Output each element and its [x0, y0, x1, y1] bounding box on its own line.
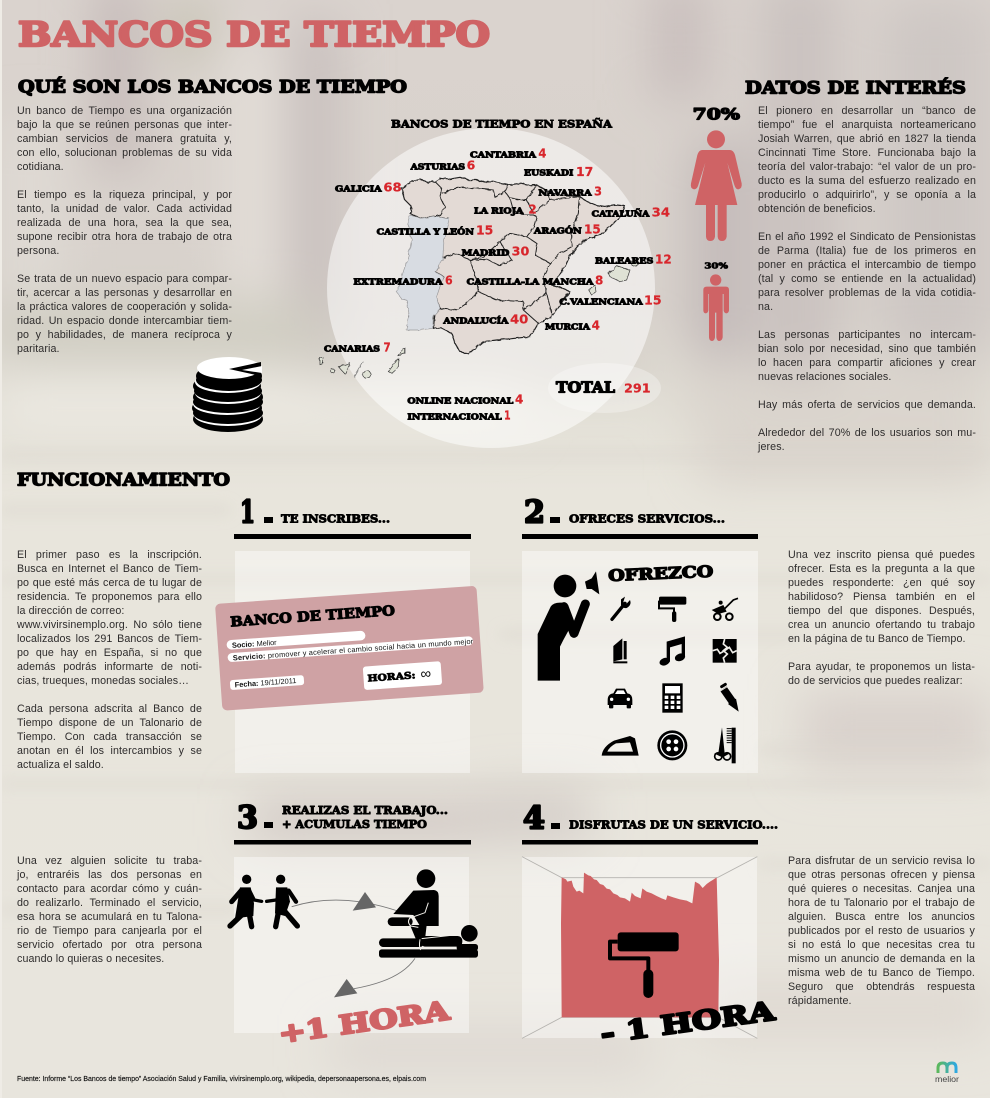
text: step 4 [788, 855, 975, 1007]
icon: man 30% [703, 260, 729, 341]
step 2 heading: OFRECES SERVICIOS... [569, 512, 725, 526]
label: Internacional 1: 1 [504, 408, 511, 422]
text: qué son, paragraph 2: tanto, la unidad de valor. Cada actividad [17, 203, 232, 215]
text: datos de interés, paragraph 2 [758, 231, 976, 313]
label: Murcia 4 [545, 318, 600, 332]
text: datos de interés, paragraph 5 [758, 427, 976, 453]
text: step 4: que otras personas ofrecen y piensa [788, 869, 975, 881]
step 2 heading: 2 [524, 494, 545, 530]
text: qué son, paragraph 3: tir, acercar a las personas y desarrollar en [17, 287, 232, 299]
label: Galicia 68: GALICIA [335, 183, 383, 193]
icon: person with megaphone [538, 571, 599, 681]
text: step 3: servicio ofertado por otra persona [17, 939, 202, 951]
label: C. Valenciana 15: 15 [644, 294, 662, 308]
text: datos de interés, paragraph 1: producirlo o adquirirlo”, y se oponía a la [758, 189, 976, 201]
icon: massage [379, 869, 478, 958]
label: 70%: 70% [693, 105, 740, 124]
label: Online nacional 4: ONLINE NACIONAL [407, 395, 514, 405]
label: Aragón 15 [533, 223, 601, 237]
text: step 3: jo, entraréis las dos personas en [17, 869, 202, 881]
label: Castilla-La Mancha 8: CASTILLA-LA MANCHA [467, 277, 594, 287]
label: Online nacional 4 [407, 392, 523, 406]
label: Cataluña 34: 34 [652, 205, 670, 219]
step 3 heading: REALIZAS EL TRABAJO... [282, 804, 448, 817]
text: step 1, paragraph 2: anotan en él los intercambios y se [17, 745, 202, 757]
text: qué son, paragraph 3: ridad. Un espacio donde intercambiar tiem- [17, 315, 232, 327]
total ellipse backdrop [548, 363, 661, 413]
step 1 heading [240, 494, 390, 530]
text: qué son, paragraph 3: paritaria. [17, 343, 60, 355]
rule [234, 840, 471, 844]
text: qué son, paragraph 1: cotidiana. [17, 161, 64, 173]
text: datos de interés, paragraph 2: de Parma (Italia) fue de los primeros en [758, 245, 976, 257]
heading: qué son los bancos de tiempo: QUÉ SON LOS BANCOS DE TIEMPO [18, 76, 407, 98]
icon: woman 70% [691, 105, 742, 241]
text: datos de interés, paragraph 1: Cincinnati Time Store. Funcionaba bajo la [758, 147, 976, 159]
text: step 4: publicados por el resto de usuarios y [788, 925, 975, 937]
text: qué son, paragraph 2: supone recibir otra hora de trabajo de otra [17, 231, 232, 243]
label: total 291: TOTAL [556, 379, 615, 396]
text: datos de interés, paragraph 3: lo hacen para compartir aficiones y crear [758, 357, 976, 369]
regional labels [324, 146, 672, 422]
text: qué son, paragraph 3: la práctica valores de cooperación y solida- [17, 301, 232, 313]
label: La Rioja 2: 2 [528, 203, 537, 217]
icon: big paint roller [610, 932, 679, 998]
text: step 1, paragraph 1: cias, trueques, monedas sociales… [17, 675, 189, 687]
label: +1 hora: +1 HORA [277, 996, 452, 1050]
text: step 2, paragraph 2: do de servicios que puedes realizar: [788, 675, 963, 687]
arrow: to plus one hour [334, 958, 415, 997]
text: datos de interés, paragraph 5: Alrededor del 70% de los usuarios son mu- [758, 427, 976, 439]
text: step 3: Una vez alguien solicite tu traba- [17, 855, 202, 867]
step 3 heading [237, 800, 448, 836]
text: step 1, paragraph 1: www.vivirsinemplo.org. No sólo tiene [17, 619, 202, 631]
logo: melior [935, 1063, 959, 1084]
label: Baleares 12: BALEARES [595, 255, 654, 265]
footer source: Fuente: Informe “Los Bancos de tiempo” Asociación Salud y Familia, vivirsinemplo.org, wikipedia, depersonaapersona.es, elpais.com [17, 1076, 426, 1083]
text: datos de interés, paragraph 1: obtención de beneficios. [758, 203, 876, 215]
step 4 heading: 4 [523, 800, 545, 836]
text: step 4: qué quieres o necesitas. Canjea una [788, 883, 975, 895]
text: step 1, paragraph 2: Cada persona adscrita al Banco de [17, 703, 202, 715]
card title: BANCO DE TIEMPO [230, 603, 396, 630]
panel: map of Spain [320, 116, 672, 448]
label: Canarias 7: 7 [383, 340, 391, 354]
label: Castilla y León 15 [377, 223, 493, 237]
text: step 2, paragraph 2: Para ayudar, te proponemos un lista- [788, 661, 975, 673]
text: step 1, paragraph 2: Tiempo dispone de un Talonario de [17, 717, 202, 729]
icon: puzzle [713, 639, 737, 663]
card: servicio: Servicio: promover y acelerar el cambio social hacia un mundo mejor [232, 637, 474, 662]
text: datos de interés, paragraph 5: jeres. [758, 441, 785, 453]
text: step 3: rio de Tiempo para canjearla por el [17, 925, 202, 937]
card: horas [363, 661, 442, 690]
label: Aragón 15: 15 [584, 223, 601, 237]
text: qué son, paragraph 1: Un banco de Tiempo es una organización [17, 105, 232, 117]
woman figure [691, 130, 742, 241]
text: datos de interés, paragraph 1: Josiah Warren, que abrió en 1827 la tienda [758, 133, 976, 145]
painted wall [561, 873, 719, 1017]
text: step 2, paragraph 1 [788, 549, 975, 645]
label: Internacional 1: INTERNACIONAL [407, 411, 502, 421]
text: step 1, paragraph 1: la dirección de correo: [17, 605, 124, 617]
map shapes [320, 177, 638, 378]
text: step 1, paragraph 1: po que esté más cerca de tu lugar de [17, 577, 202, 589]
step 2 heading [524, 494, 725, 530]
text: step 2, paragraph 1: Una vez inscrito piensa qué puedes [788, 549, 975, 561]
text: datos de interés, paragraph 1: El pionero en desarrollar un “banco de [758, 105, 976, 117]
label: Online nacional 4: 4 [515, 392, 523, 406]
card: horas: HORAS: [367, 670, 416, 685]
label: La Rioja 2 [474, 203, 537, 217]
card: socio: Socio: Melior [232, 638, 277, 650]
label: Navarra 3: NAVARRA [538, 188, 593, 198]
label: Baleares 12 [595, 252, 672, 266]
icon: pencil [720, 684, 739, 712]
text: step 2, paragraph 1: habilidoso? Piensa también en el [788, 591, 975, 603]
text: step 1, paragraph 1 [17, 549, 202, 687]
panel: step 1 [235, 551, 470, 773]
text: qué son, paragraph 3 [17, 273, 232, 355]
text: step 2, paragraph 1: en la página de tu Banco de Tiempo. [788, 633, 966, 645]
text: qué son, paragraph 2: persona. [17, 245, 59, 257]
text: step 2, paragraph 1: crea un anuncio ofertando tu trabajo [788, 619, 975, 631]
label: C. Valenciana 15: C.VALENCIANA [559, 297, 644, 307]
text: step 4: Seguro que obtendrás respuesta [788, 981, 975, 993]
label: Asturias 6: 6 [467, 158, 475, 172]
map title: BANCOS DE TIEMPO EN ESPAÑA [391, 116, 613, 130]
text: qué son, paragraph 3: po y habilidades, de manera recíproca y [17, 329, 232, 341]
label: Euskadi 17 [524, 165, 593, 179]
text: qué son, paragraph 1 [17, 105, 232, 173]
heading: datos de interés: DATOS DE INTERÉS [745, 78, 966, 98]
label: Cantabria 4: CANTABRIA [470, 149, 537, 159]
icon: button [657, 730, 687, 760]
heading: funcionamiento: FUNCIONAMIENTO [17, 470, 230, 490]
label: Castilla y León 15: 15 [476, 223, 493, 237]
text: step 4: Para disfrutar de un servicio revisa lo [788, 855, 975, 867]
text: qué son, paragraph 1: cambian servicios de manera gratuita y, [17, 133, 232, 145]
label: C. Valenciana 15 [559, 294, 662, 308]
text: qué son, paragraph 3: Se trata de un nuevo espacio para compar- [17, 273, 232, 285]
step 3 heading: + ACUMULAS TIEMPO [282, 818, 427, 831]
text: datos de interés, paragraph 1: ducto es la suma del esfuerzo realizado en [758, 175, 976, 187]
text: step 1, paragraph 1: Busca en Internet el Banco de Tiem- [17, 563, 202, 575]
text: datos de interés, paragraph 4: Hay más oferta de servicios que demanda. [758, 399, 976, 411]
logo: melior: melior [935, 1075, 959, 1084]
label: Cantabria 4: 4 [538, 146, 546, 160]
text: step 2, paragraph 1: tiempo del que dispones. Después, [788, 605, 975, 617]
text: step 3: cuando lo quieras o necesites. [17, 953, 164, 965]
label: Madrid 30: 30 [512, 245, 529, 259]
text: step 1, paragraph 2: Tiempo. Con cada transacción se [17, 731, 202, 743]
label: Madrid 30: MADRID [462, 248, 509, 258]
label: Extremadura 6: 6 [445, 274, 453, 288]
text: step 4: rápidamente. [788, 995, 852, 1007]
text: step 4: alguien. Busca entre los anuncios [788, 911, 975, 923]
room perspective lines [522, 857, 757, 1038]
text: step 4: si no está lo que necesitas crea tu [788, 939, 975, 951]
text: qué son, paragraph 2 [17, 189, 232, 257]
text: step 1, paragraph 2 [17, 703, 202, 771]
text: datos de interés, paragraph 2: para resolver problemas de la vida cotidia- [758, 287, 976, 299]
label: Cataluña 34 [592, 205, 670, 219]
map circle [327, 128, 655, 448]
step 4 heading [523, 800, 778, 836]
text: datos de interés, paragraph 3: Las personas participantes no intercam- [758, 329, 976, 341]
text: step 3 [16, 855, 202, 965]
text: step 1, paragraph 1: El primer paso es la inscripción. [17, 549, 202, 561]
rule [234, 534, 471, 539]
label: Navarra 3: 3 [594, 185, 602, 199]
label: Andalucía 40 [442, 312, 528, 326]
arrow: to massage [292, 892, 397, 911]
text: step 3: esa hora se acumulará en tu Talona- [17, 911, 202, 923]
icon: wrench [612, 597, 631, 619]
label: Baleares 12: 12 [655, 252, 672, 266]
icon: paint roller [659, 597, 686, 622]
label: Euskadi 17: 17 [576, 165, 593, 179]
label: Internacional 1 [407, 408, 511, 422]
text: datos de interés, paragraph 1: tiempo” fue el anarquista norteamericano [758, 119, 976, 131]
text: step 3: contacto para acordar cómo y cuán- [17, 883, 202, 895]
label: Andalucía 40: 40 [510, 312, 528, 326]
text: datos de interés, paragraph 3: nuevas relaciones sociales. [758, 371, 891, 383]
label: Euskadi 17: EUSKADI [524, 168, 574, 178]
label: 30%: 30% [704, 260, 729, 270]
card: horas: ∞ [420, 665, 432, 683]
rule [522, 534, 758, 539]
label: Extremadura 6: EXTREMADURA [353, 277, 444, 287]
panel: step 4 [522, 857, 757, 1038]
text: datos de interés, paragraph 3: bian solo por necesidad, sino que también [758, 343, 976, 355]
text: qué son, paragraph 2: realizada de una hora, sea la que sea, [17, 217, 232, 229]
label: Madrid 30 [462, 245, 529, 259]
text: step 4: misma web de tu Banco de Tiempo. [788, 967, 975, 979]
label: Navarra 3 [538, 185, 602, 199]
label: ofrezco: OFREZCO [608, 562, 714, 585]
step 4 heading: DISFRUTAS DE UN SERVICIO.... [569, 818, 778, 832]
text: datos de interés, paragraph 2: En el año 1992 el Sindicato de Pensionistas [758, 231, 976, 243]
label: -1 hora: - 1 HORA [599, 997, 777, 1050]
icon: music notes [658, 636, 686, 667]
panel: step 2 [522, 551, 758, 773]
text: qué son, paragraph 2: El tiempo es la riqueza principal, y por [17, 189, 232, 201]
label: Asturias 6 [410, 158, 475, 172]
text: datos de interés, paragraph 2: na. [758, 301, 773, 313]
text: step 2, paragraph 1: puedes responderte: ¿en qué soy [788, 577, 975, 589]
label: Galicia 68 [335, 181, 402, 195]
icon: car [608, 689, 632, 708]
label: Cataluña 34: CATALUÑA [592, 208, 650, 218]
label: Extremadura 6 [353, 274, 453, 288]
label: Murcia 4: MURCIA [545, 321, 591, 331]
label: Castilla y León 15: CASTILLA Y LEÓN [377, 226, 474, 236]
label: Canarias 7 [324, 340, 391, 354]
label: Castilla-La Mancha 8: 8 [595, 274, 603, 288]
icon: stroller [712, 598, 738, 620]
icon: stack of coins [192, 357, 263, 432]
label: Cantabria 4 [470, 146, 546, 160]
label: Canarias 7: CANARIAS [324, 343, 380, 353]
text: step 1, paragraph 1: localizados los 291 Bancos de Tiem- [17, 633, 202, 645]
label: Aragón 15: ARAGÓN [533, 226, 582, 236]
label: La Rioja 2: LA RIOJA [474, 206, 524, 216]
icon: scissors and comb [714, 727, 736, 763]
label: Murcia 4: 4 [592, 318, 600, 332]
text: datos de interés, paragraph 2: (tal y como se entiende en la actualidad) [758, 273, 976, 285]
text: datos de interés, paragraph 3 [758, 329, 976, 383]
label: total 291 [556, 379, 651, 396]
icon: iron [602, 736, 639, 756]
label: Asturias 6: ASTURIAS [410, 161, 465, 171]
step 1 heading: 1 [240, 494, 255, 530]
text: qué son, paragraph 1: bajo la que se reúnen personas que inter- [17, 119, 232, 131]
icon: book [613, 638, 627, 663]
card: fecha: Fecha: 19/11/2011 [234, 676, 297, 689]
label: Galicia 68: 68 [383, 181, 402, 195]
text: step 1, paragraph 1: además podrás informarte de noti- [17, 661, 202, 673]
label: total 291: 291 [624, 382, 651, 396]
icon: two people shaking hands [230, 875, 297, 927]
rule [522, 840, 758, 844]
text: step 4: hora de tu Talonario por el trabajo de [788, 897, 975, 909]
text: datos de interés, paragraph 1: teoría del valor-trabajo: “el valor de un pro- [758, 161, 976, 173]
text: step 1, paragraph 1: residencia. Te proponemos para ello [17, 591, 202, 603]
icon: calculator [662, 683, 683, 713]
text: step 2, paragraph 2 [788, 661, 975, 687]
text: step 1, paragraph 1: po que hay en España, si no que [17, 647, 202, 659]
step 3 heading: 3 [237, 800, 258, 836]
man figure [703, 274, 729, 341]
label: Andalucía 40: ANDALUCÍA [442, 315, 509, 325]
text: step 1, paragraph 2: actualiza el saldo. [17, 759, 104, 771]
label: Castilla-La Mancha 8 [467, 274, 603, 288]
text: datos de interés, paragraph 1 [758, 105, 976, 215]
text: step 2, paragraph 1: ofrecer. Esta es la pregunta a la que [788, 563, 975, 575]
text: qué son, paragraph 1: con ello, solucionan problemas de su vida [17, 147, 232, 159]
text: step 4: mismo un anuncio de demanda en la [788, 953, 975, 965]
step 1 heading: TE INSCRIBES... [281, 512, 390, 526]
text: step 3: do realizarlo. Terminado el servicio, [17, 897, 202, 909]
title: BANCOS DE TIEMPO [18, 15, 490, 55]
text: datos de interés, paragraph 2: poner en práctica el intercambio de tiempo [758, 259, 976, 271]
card: banco de tiempo [215, 586, 484, 711]
panel: step 3 [234, 857, 469, 1033]
